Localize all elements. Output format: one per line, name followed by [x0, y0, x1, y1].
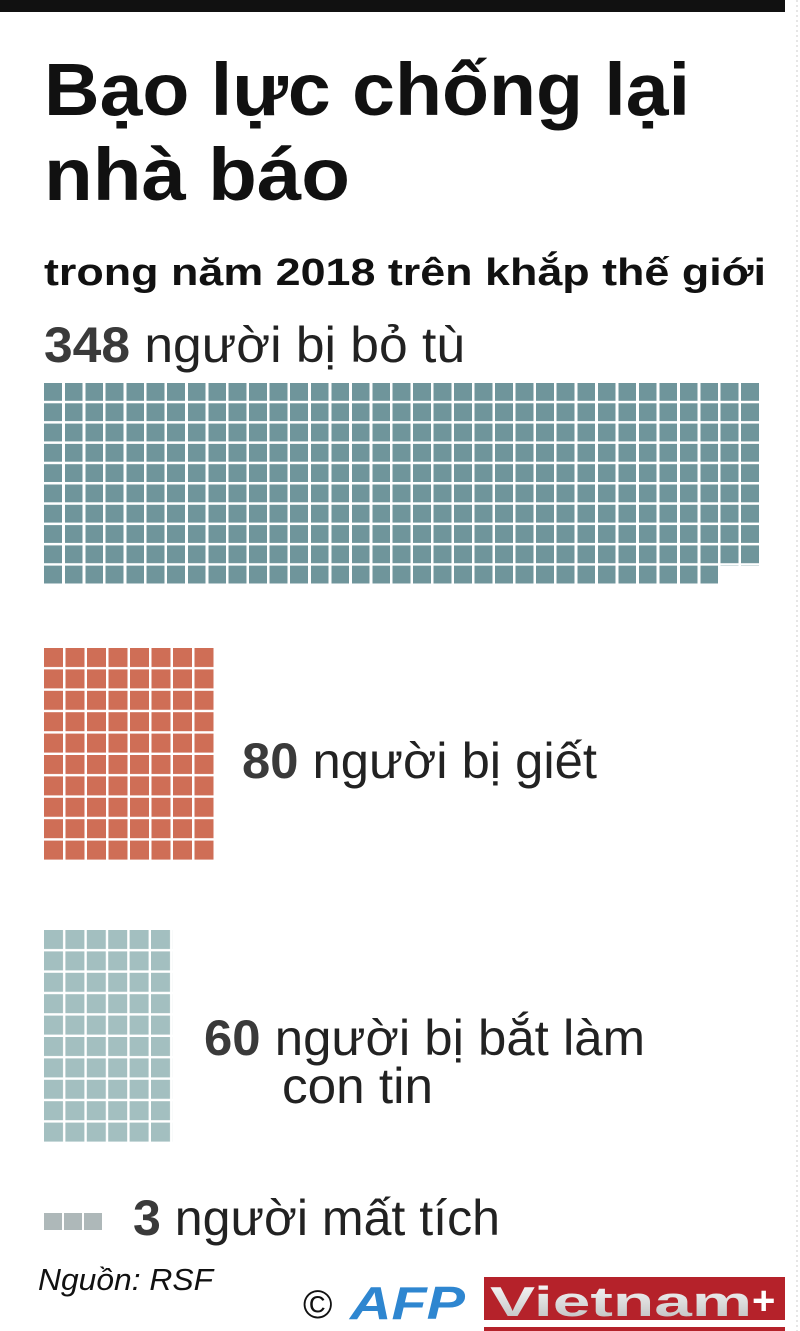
label: 60 hostages: 60 người bị bắt làm [204, 1010, 645, 1066]
waffle chart: 80 [44, 648, 216, 862]
logo: AFP: AFP [349, 1277, 465, 1329]
label: 348 imprisoned: 348 người bị bỏ tù [44, 317, 465, 373]
title [44, 48, 690, 216]
waffle chart: 348 [44, 383, 762, 586]
logo: Vietnam+ [484, 1277, 785, 1331]
logo: AFP: © [303, 1283, 332, 1327]
logo: AFP [303, 1277, 465, 1329]
logo: Vietnam+: Vietnam [490, 1278, 752, 1325]
subtitle: trong năm 2018 trên khắp thế giới [44, 250, 766, 294]
title: nhà báo [44, 133, 350, 216]
label: 80 killed: 80 người bị giết [242, 733, 597, 789]
label: 60 hostages: con tin [282, 1058, 433, 1114]
source: Nguồn: RSF [38, 1262, 215, 1297]
logo: Vietnam+: + [752, 1279, 775, 1323]
title: Bạo lực chống lại [44, 48, 690, 131]
label: 3 missing: 3 người mất tích [133, 1190, 500, 1246]
waffle chart: 60 [44, 930, 172, 1144]
waffle chart: 3 [44, 1213, 102, 1230]
label: 60 hostages [204, 1010, 645, 1114]
